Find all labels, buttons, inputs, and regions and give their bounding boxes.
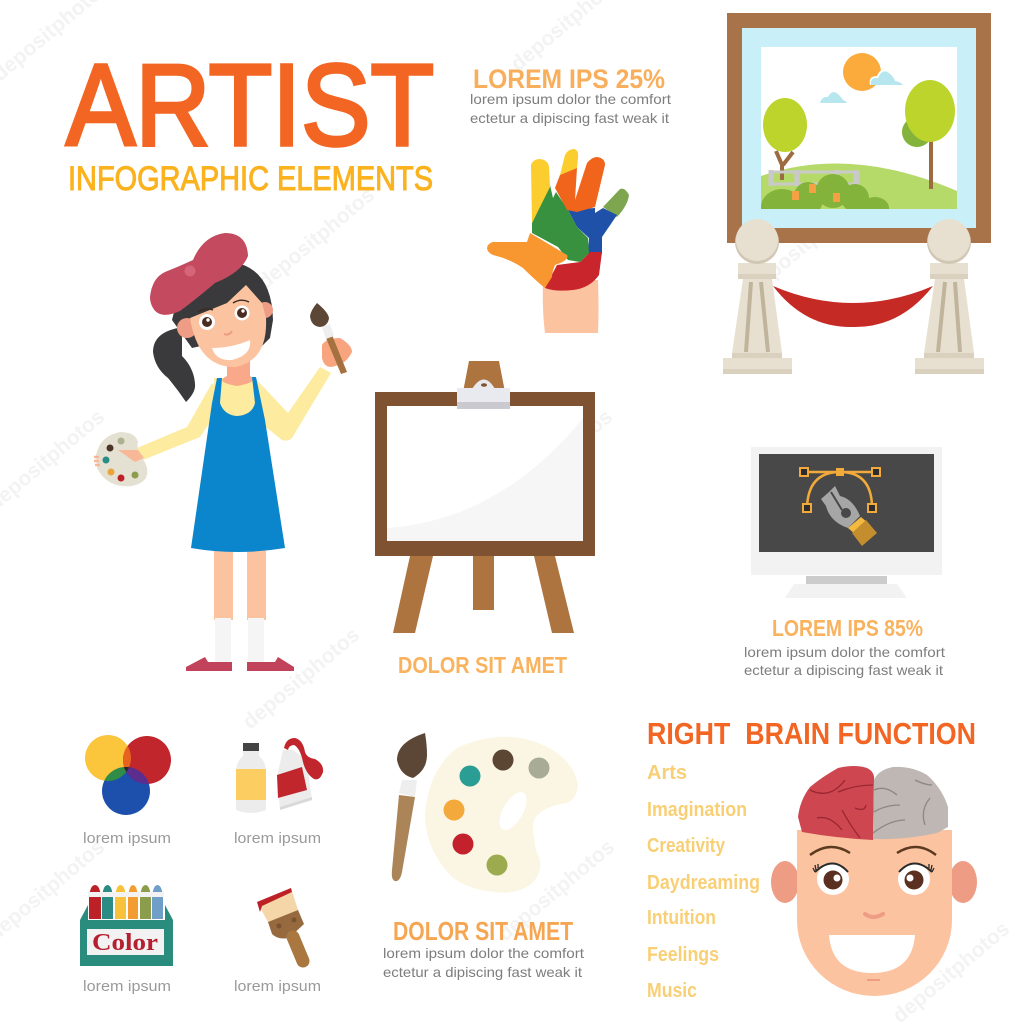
face xyxy=(797,830,952,996)
eyes xyxy=(813,863,934,895)
artist character xyxy=(94,233,352,671)
label: lorem ipsum xyxy=(234,830,321,847)
text block: lorem ips 85%: lorem ipsum dolor the comfort xyxy=(744,644,945,660)
mouth xyxy=(212,340,250,360)
easel legs xyxy=(393,556,574,633)
text block: lorem ips 25%: LOREM IPS 25% xyxy=(473,64,665,94)
ear left xyxy=(177,318,197,338)
text: depositphotos xyxy=(491,405,617,516)
pen nib xyxy=(821,486,877,546)
list: brain functions xyxy=(647,762,760,1002)
eyebrows xyxy=(198,300,249,312)
arms xyxy=(137,367,331,460)
ear right xyxy=(257,302,273,318)
monitor stand xyxy=(806,576,887,584)
chin mark xyxy=(867,979,880,981)
hair back xyxy=(172,262,273,348)
text block: lorem ips 85%: ectetur a dipiscing fast weak it xyxy=(744,662,943,678)
icon: painted hand xyxy=(487,149,629,333)
list: brain functions: Feelings xyxy=(647,944,719,966)
small palette xyxy=(94,432,147,486)
text: depositphotos xyxy=(238,623,364,734)
subtitle: INFOGRAPHIC ELEMENTS xyxy=(68,160,433,198)
text block: dolor sit amet xyxy=(383,916,584,980)
box xyxy=(80,905,173,966)
easel top bracket xyxy=(463,361,505,392)
ears xyxy=(771,861,977,903)
icon: colour circles xyxy=(85,735,171,815)
dress xyxy=(191,377,285,552)
beret button xyxy=(184,266,196,276)
label: lorem ipsum xyxy=(234,978,321,995)
framed painting on display xyxy=(723,13,991,374)
list: brain functions: Imagination xyxy=(647,799,747,821)
text block: lorem ips 25% xyxy=(470,64,671,126)
legs and socks xyxy=(214,548,266,662)
easel xyxy=(375,361,595,633)
monitor base xyxy=(785,584,907,598)
text: depositphotos xyxy=(743,188,869,299)
bezier curve xyxy=(800,468,880,512)
label: lorem ipsum xyxy=(83,978,171,995)
icon: paint bottle and tube xyxy=(236,738,323,813)
list: brain functions: Arts xyxy=(647,762,687,784)
text block: dolor sit amet: lorem ipsum dolor the comfort xyxy=(383,945,584,961)
face xyxy=(190,285,266,367)
shoes xyxy=(186,657,294,671)
painting frame xyxy=(727,13,991,243)
painting canvas xyxy=(761,47,957,225)
paintbrush and hand xyxy=(310,303,352,374)
text block: dolor sit amet: ectetur a dipiscing fast weak it xyxy=(383,964,582,980)
text block: lorem ips 85% xyxy=(744,615,945,678)
text block: lorem ips 25%: ectetur a dipiscing fast weak it xyxy=(470,110,669,126)
box label text: Color xyxy=(92,930,158,956)
crayons xyxy=(88,885,164,919)
nose xyxy=(865,914,883,917)
ponytail xyxy=(153,328,195,402)
eyebrows xyxy=(810,847,936,855)
text: depositphotos xyxy=(253,183,379,294)
icon: crayon box xyxy=(80,885,173,966)
text block: dolor sit amet: DOLOR SIT AMET xyxy=(393,916,573,946)
eye left xyxy=(199,314,215,330)
right stanchion xyxy=(915,219,984,374)
brain right, grey xyxy=(873,767,948,839)
red rope xyxy=(773,286,933,327)
label: lorem ipsum xyxy=(83,830,171,847)
left stanchion xyxy=(723,219,792,374)
text: depositphotos xyxy=(493,835,619,946)
head with brain xyxy=(771,766,977,996)
list: brain functions: Music xyxy=(647,980,697,1002)
mouth xyxy=(829,935,915,973)
easel clip xyxy=(457,380,510,409)
heading: right brain function: RIGHT BRAIN FUNCTION xyxy=(647,716,976,751)
title: ARTIST xyxy=(66,40,434,170)
list: brain functions: Creativity xyxy=(647,835,726,857)
monitor with pen tool xyxy=(751,447,942,598)
icon: large brush xyxy=(392,733,427,881)
list: brain functions: Daydreaming xyxy=(647,872,760,894)
caption: dolor sit amet: DOLOR SIT AMET xyxy=(398,652,567,678)
monitor body xyxy=(751,447,942,575)
neck xyxy=(222,360,253,386)
list: brain functions: Intuition xyxy=(647,907,716,929)
eye right xyxy=(234,306,250,320)
brain left, red xyxy=(798,766,874,840)
icon: flat brush xyxy=(257,888,304,961)
nose xyxy=(224,331,232,335)
icon: large palette xyxy=(425,737,578,893)
beret xyxy=(150,233,248,315)
text block: lorem ips 85%: LOREM IPS 85% xyxy=(772,615,923,641)
text block: lorem ips 25%: lorem ipsum dolor the comfort xyxy=(470,91,671,107)
easel board xyxy=(375,392,595,556)
